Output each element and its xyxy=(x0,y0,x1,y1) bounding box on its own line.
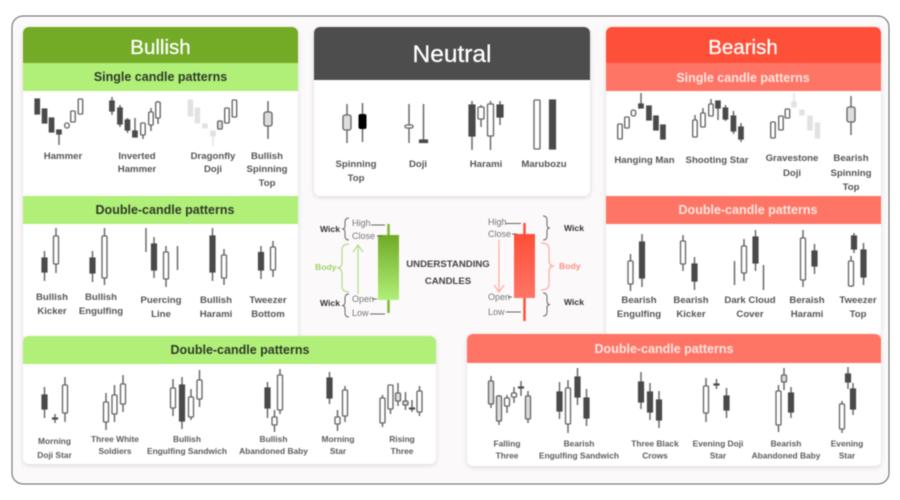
bullish candle anatomy xyxy=(315,218,399,318)
pattern: inverted hammer: Inverted xyxy=(118,151,156,162)
bullish double candle heading: Double-candle patterns xyxy=(96,203,234,217)
pattern: gravestone doji xyxy=(766,93,820,179)
bearish bottom heading xyxy=(467,334,881,363)
pattern: three white soldiers: Three White xyxy=(91,434,139,444)
pattern: bullish harami: Harami xyxy=(200,309,232,320)
pattern: piercing line xyxy=(140,228,182,320)
bullish candle anatomy: Low xyxy=(352,308,369,318)
pattern: hammer xyxy=(35,99,83,162)
pattern: three black crows: Crows xyxy=(642,450,668,460)
pattern: evening doji star: Star xyxy=(710,450,727,460)
pattern: spinning top xyxy=(335,103,377,184)
bearish candle anatomy: Body xyxy=(559,261,581,271)
panel: bearish bottom patterns xyxy=(467,334,881,466)
heading: understanding candles xyxy=(406,259,490,287)
panel: understanding candles xyxy=(315,216,584,321)
bearish candle anatomy: Low xyxy=(488,307,505,317)
pattern: inverted hammer xyxy=(110,97,160,175)
pattern: evening doji star: Evening Doji xyxy=(693,438,743,448)
pattern: morning star: Star xyxy=(330,446,347,456)
panel: neutral xyxy=(314,27,590,196)
pattern: bullish spinning top: Top xyxy=(259,178,276,189)
pattern: bearish engulfing sandwich: Bearish xyxy=(564,438,594,448)
bearish double candle heading: Double-candle patterns xyxy=(679,203,817,217)
pattern: evening star xyxy=(831,367,863,460)
pattern: bearish abandoned baby xyxy=(752,368,821,460)
pattern: rising three: Rising xyxy=(389,434,415,444)
pattern: bearish spinning top: Spinning xyxy=(830,168,872,179)
pattern: bullish kicker: Kicker xyxy=(37,306,67,317)
pattern: bearish kicker: Bearish xyxy=(673,295,709,306)
bullish candle anatomy: Wick xyxy=(320,224,340,234)
bullish candle anatomy: Open xyxy=(352,294,374,304)
bullish header: Bullish xyxy=(130,36,191,59)
pattern: hanging man: Hanging Man xyxy=(614,155,675,166)
bullish candle anatomy: Body xyxy=(315,262,337,272)
pattern: tweezer bottom xyxy=(249,241,287,320)
bullish bottom heading xyxy=(23,336,436,364)
pattern: bullish spinning top xyxy=(246,101,288,189)
pattern: bullish kicker: Bullish xyxy=(36,292,68,303)
pattern: tweezer top: Tweezer xyxy=(839,295,877,306)
pattern: bearish engulfing: Bearish xyxy=(621,295,657,306)
pattern: piercing line: Puercing xyxy=(140,295,182,306)
pattern: three black crows xyxy=(631,372,679,460)
bullish candle anatomy: Wick xyxy=(320,298,340,308)
pattern: doji: Doji xyxy=(409,159,427,170)
pattern: bullish engulfing xyxy=(79,228,123,317)
pattern: spinning top: Spinning xyxy=(335,159,377,170)
pattern: rising three: Three xyxy=(391,446,414,456)
pattern: rising three xyxy=(380,383,422,456)
pattern: morning doji star xyxy=(37,377,72,460)
pattern: falling three: Three xyxy=(496,450,519,460)
pattern: doji xyxy=(405,104,428,170)
bearish bottom heading: Double-candle patterns xyxy=(595,342,733,356)
pattern: tweezer top: Top xyxy=(850,309,867,320)
pattern: bullish harami xyxy=(200,228,232,320)
pattern: shooting star: Shooting Star xyxy=(686,155,749,166)
pattern: three white soldiers xyxy=(91,375,139,456)
pattern: shooting star xyxy=(686,99,749,166)
panel: bullish xyxy=(23,27,298,339)
pattern: bearish abandoned baby: Abandoned Baby xyxy=(752,450,821,460)
bullish single candle heading xyxy=(23,63,298,91)
pattern: tweezer top xyxy=(839,233,877,320)
pattern: three black crows: Three Black xyxy=(631,438,679,448)
pattern: bearish spinning top: Bearish xyxy=(833,153,869,164)
pattern: falling three xyxy=(488,376,530,460)
pattern: bullish engulfing sandwich xyxy=(147,370,227,456)
pattern: gravestone doji: Gravestone xyxy=(766,153,818,164)
pattern: bearish harami: Harami xyxy=(791,309,823,320)
bearish candle anatomy: Close xyxy=(488,229,511,239)
pattern: marubozu: Marubozu xyxy=(521,159,567,170)
pattern: harami xyxy=(469,101,503,170)
pattern: bullish spinning top: Spinning xyxy=(246,164,288,175)
bearish candle anatomy xyxy=(488,216,584,321)
pattern: bearish harami: Beraish xyxy=(789,295,825,306)
heading: understanding candles: CANDLES xyxy=(425,276,472,287)
neutral header: Neutral xyxy=(413,41,491,68)
pattern: bearish engulfing xyxy=(617,234,661,320)
pattern: bullish spinning top: Bullish xyxy=(251,151,283,162)
pattern: inverted hammer: Hammer xyxy=(118,164,156,175)
pattern: bullish abandoned baby: Bullish xyxy=(260,434,287,444)
pattern: bearish engulfing sandwich xyxy=(539,368,619,460)
panel: bearish xyxy=(606,27,881,337)
pattern: falling three: Falling xyxy=(494,438,520,448)
pattern: bearish kicker xyxy=(673,235,709,320)
pattern: dark cloud cover: Cover xyxy=(736,309,764,320)
pattern: evening star: Star xyxy=(839,450,856,460)
bullish header xyxy=(23,27,298,63)
bearish candle anatomy: Open xyxy=(488,292,510,302)
pattern: dark cloud cover: Dark Cloud xyxy=(724,295,776,306)
pattern: morning star: Morning xyxy=(321,434,355,444)
pattern: tweezer bottom: Tweezer xyxy=(249,295,287,306)
pattern: bearish kicker: Kicker xyxy=(676,309,706,320)
pattern: bearish spinning top xyxy=(830,96,872,193)
pattern: tweezer bottom: Bottom xyxy=(251,309,285,320)
pattern: bearish abandoned baby: Bearish xyxy=(771,438,801,448)
pattern: dark cloud cover xyxy=(724,230,776,320)
pattern: bullish engulfing sandwich: Engulfing Sandwich xyxy=(147,446,227,456)
pattern: bearish spinning top: Top xyxy=(843,182,860,193)
heading: understanding candles: UNDERSTANDING xyxy=(406,259,490,270)
bearish header xyxy=(606,27,881,63)
pattern: bearish engulfing: Engulfing xyxy=(617,309,661,320)
pattern: spinning top: Top xyxy=(348,173,365,184)
bearish candle anatomy: Wick xyxy=(564,223,584,233)
pattern: morning star xyxy=(321,372,355,456)
pattern: bullish engulfing: Bullish xyxy=(85,292,117,303)
pattern: harami: Harami xyxy=(470,159,502,170)
pattern: bullish engulfing sandwich: Bullish xyxy=(173,434,201,444)
bullish single candle heading: Single candle patterns xyxy=(94,70,227,84)
bullish double candle heading xyxy=(23,196,298,224)
pattern: gravestone doji: Doji xyxy=(783,168,801,179)
pattern: morning doji star: Morning xyxy=(38,436,71,446)
pattern: bullish abandoned baby: Abandoned Baby xyxy=(239,446,308,456)
neutral header xyxy=(314,27,590,80)
pattern: bullish engulfing: Engulfing xyxy=(79,306,123,317)
bullish candle anatomy: High xyxy=(352,218,371,228)
pattern: marubozu xyxy=(521,100,567,170)
pattern: hanging man xyxy=(614,93,675,166)
bearish single candle heading xyxy=(606,63,881,91)
bearish candle anatomy: High xyxy=(488,217,507,227)
pattern: morning doji star: Doji Star xyxy=(37,450,72,460)
pattern: bullish kicker xyxy=(36,228,68,317)
pattern: dragonfly doji xyxy=(188,100,237,175)
pattern: piercing line: Line xyxy=(151,309,171,320)
bullish candle anatomy: Close xyxy=(352,231,375,241)
pattern: bullish abandoned baby xyxy=(239,369,308,456)
pattern: three white soldiers: Soldiers xyxy=(98,446,132,456)
pattern: evening doji star xyxy=(693,378,743,460)
pattern: evening star: Evening xyxy=(831,438,863,448)
bearish candle anatomy: Wick xyxy=(564,297,584,307)
pattern: hammer: Hammer xyxy=(44,151,82,162)
pattern: bearish engulfing sandwich: Engulfing Sandwich xyxy=(539,450,619,460)
pattern: dragonfly doji: Doji xyxy=(204,164,222,175)
panel: bullish bottom patterns xyxy=(23,336,436,464)
bearish double candle heading xyxy=(606,196,881,224)
pattern: dragonfly doji: Dragonfly xyxy=(191,151,236,162)
bearish header: Bearish xyxy=(708,36,778,59)
pattern: bullish harami: Bullish xyxy=(200,295,232,306)
bullish bottom heading: Double-candle patterns xyxy=(171,343,309,357)
bearish single candle heading: Single candle patterns xyxy=(676,71,810,85)
pattern: bearish harami xyxy=(789,230,825,320)
